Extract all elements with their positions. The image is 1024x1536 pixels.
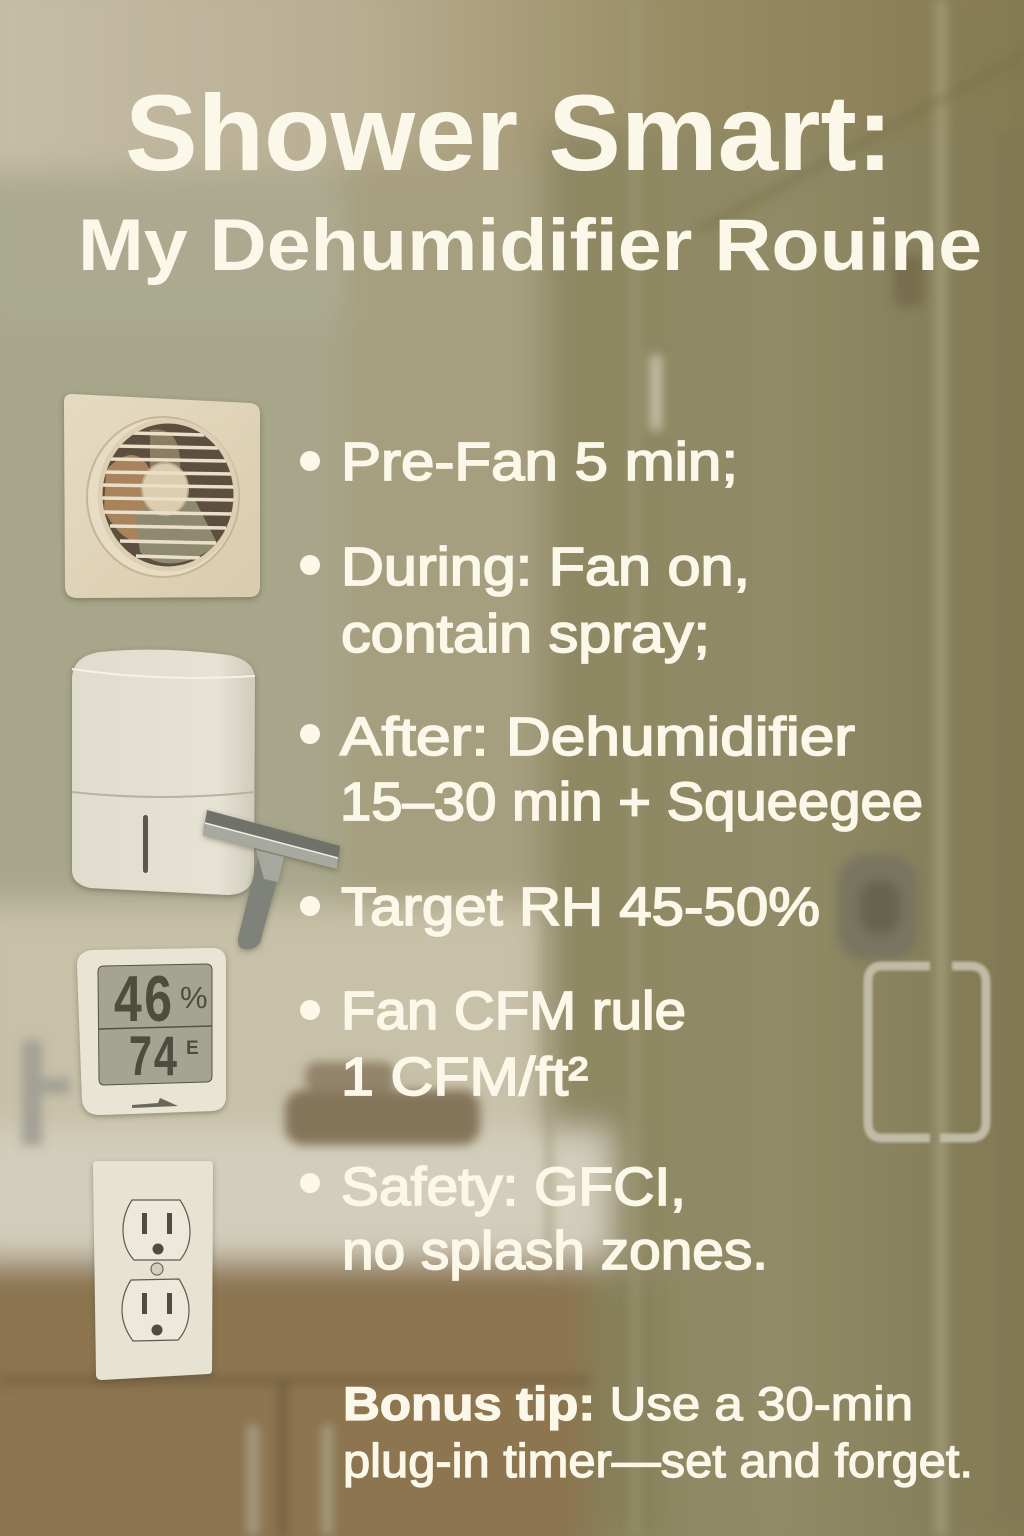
bullet: safety: no splash zones.: [342, 1221, 768, 1281]
small arrow: [132, 1098, 178, 1108]
bullet: safety: Safety: GFCI,: [341, 1157, 686, 1217]
title line 2: My Dehumidifier Rouine: [78, 205, 982, 286]
bullet: safety: [300, 1157, 768, 1281]
bullet: after: 15–30 min + Squeegee: [340, 772, 923, 832]
LCD screen: [98, 964, 212, 1085]
title: [78, 72, 982, 286]
icon: digital hygrometer: [77, 948, 226, 1115]
icon: wall outlet: [93, 1161, 213, 1380]
bullet: pre-fan: Pre-Fan 5 min;: [341, 432, 738, 492]
shower door handle: [868, 966, 986, 1138]
bonus tip: [343, 1377, 973, 1487]
temperature reading: 74: [128, 1028, 178, 1093]
title line 1: Shower Smart:: [125, 72, 893, 193]
bonus tip: Bonus tip: Use a 30-min: [343, 1377, 913, 1430]
temperature unit: E: [186, 1038, 199, 1059]
bullet: after: After: Dehumidifier: [340, 707, 855, 767]
bullet list: [300, 432, 923, 1281]
humidity reading: 46: [113, 965, 173, 1042]
icon: squeegee: [203, 810, 340, 949]
icon: bathroom exhaust fan: [64, 394, 260, 598]
percent sign: %: [180, 980, 208, 1015]
bullet: fan CFM rule: 1 CFM/ft²: [341, 1047, 588, 1107]
bonus tip: plug-in timer—set and forget.: [343, 1434, 973, 1487]
bullet: target RH: Target RH 45-50%: [341, 877, 820, 937]
bullet: fan CFM rule: [300, 981, 686, 1107]
bullet: after: [300, 707, 923, 832]
icon: white dehumidifier: [72, 650, 255, 895]
bullet: during: [300, 537, 750, 664]
bullet: fan CFM rule: Fan CFM rule: [341, 981, 686, 1041]
bullet: during: During: Fan on,: [341, 537, 750, 597]
bullet: during: contain spray;: [341, 604, 710, 664]
